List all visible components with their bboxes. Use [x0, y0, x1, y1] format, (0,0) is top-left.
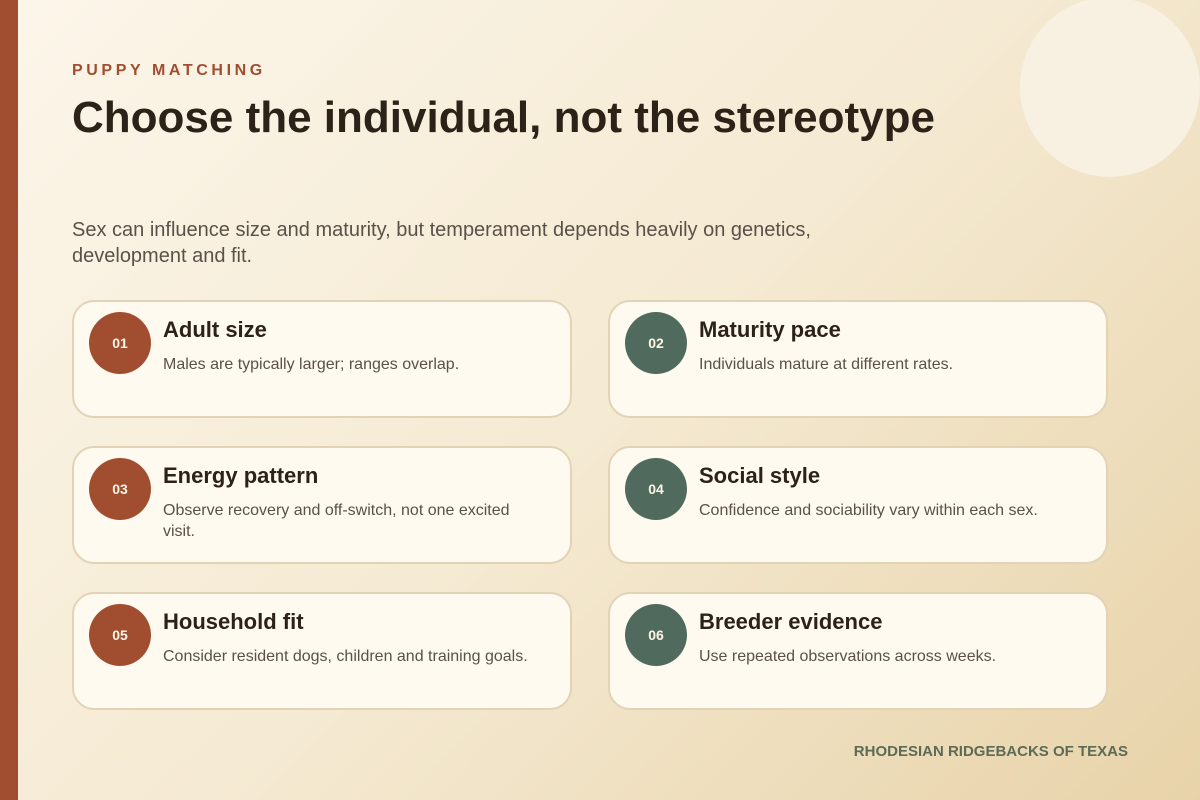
text: household fit: Consider resident dogs, children and training goals.	[163, 648, 528, 665]
heading: adult size: Adult size	[163, 317, 267, 342]
eyebrow label: PUPPY MATCHING	[72, 62, 266, 79]
card 02: maturity pace	[608, 300, 1108, 418]
decorative circle	[1020, 0, 1200, 177]
badge 05: 05	[112, 627, 128, 643]
card 03: energy pattern	[72, 446, 572, 564]
badge 02: 02	[648, 335, 664, 351]
badge 04: 04	[648, 481, 664, 497]
subtitle: Sex can influence size and maturity, but temperament depends heavily on genetics, development and fit.	[72, 219, 811, 267]
left accent bar	[0, 0, 18, 800]
card 04: social style	[608, 446, 1108, 564]
text: maturity pace: Individuals mature at different rates.	[699, 356, 953, 373]
heading: energy pattern: Energy pattern	[163, 463, 318, 488]
badge 02	[625, 312, 687, 374]
heading: social style: Social style	[699, 463, 820, 488]
text: adult size: Males are typically larger; ranges overlap.	[163, 356, 459, 373]
card 06: breeder evidence	[608, 592, 1108, 710]
title: Choose the individual, not the stereotype	[72, 93, 935, 142]
badge 03: 03	[112, 481, 128, 497]
badge 01: 01	[112, 335, 128, 351]
badge 01	[89, 312, 151, 374]
badge 06	[625, 604, 687, 666]
heading: breeder evidence: Breeder evidence	[699, 609, 882, 634]
heading: household fit: Household fit	[163, 609, 304, 634]
heading: maturity pace: Maturity pace	[699, 317, 841, 342]
footer brand: RHODESIAN RIDGEBACKS OF TEXAS	[854, 743, 1128, 760]
card 01: adult size	[72, 300, 572, 418]
badge 06: 06	[648, 627, 664, 643]
badge 03	[89, 458, 151, 520]
card 05: household fit	[72, 592, 572, 710]
text: social style: Confidence and sociability vary within each sex.	[699, 502, 1038, 519]
text: energy pattern: Observe recovery and off-switch, not one excited visit.	[163, 502, 510, 540]
text: breeder evidence: Use repeated observations across weeks.	[699, 648, 996, 665]
badge 05	[89, 604, 151, 666]
badge 04	[625, 458, 687, 520]
